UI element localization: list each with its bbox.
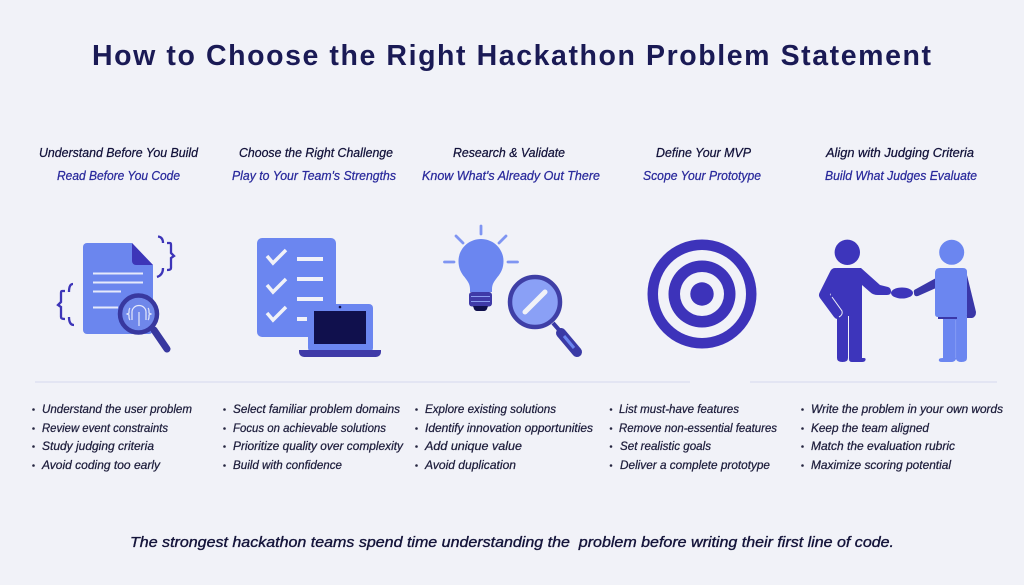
bullet list: Add unique value [424, 441, 522, 453]
bullet list: Review event constraints [42, 423, 168, 435]
bullet list [610, 404, 777, 472]
bullet list [801, 404, 1003, 472]
bullet list [223, 404, 404, 472]
panel: define your mvp [610, 146, 777, 472]
icon: target [648, 240, 756, 348]
bullet list: Understand the user problem [42, 404, 192, 416]
panel: understand before you build [32, 146, 199, 472]
heading: Understand Before You Build [39, 146, 199, 160]
title: How to Choose the Right Hackathon Problem Statement [92, 40, 932, 72]
subheading: Play to Your Team's Strengths [232, 169, 396, 183]
icon: light bulb and magnifier [444, 226, 577, 352]
bullet list: Study judging criteria [42, 441, 154, 453]
heading: Define Your MVP [656, 146, 752, 160]
icon: two people shaking hands [824, 240, 976, 362]
bullet list: Keep the team aligned [811, 423, 930, 435]
subheading: Build What Judges Evaluate [825, 169, 977, 183]
bullet list: Match the evaluation rubric [811, 441, 955, 453]
panel: choose the right challenge [223, 146, 404, 472]
heading: Choose the Right Challenge [239, 146, 393, 160]
bullet list: Identify innovation opportunities [425, 423, 593, 435]
bullet list: Maximize scoring potential [811, 460, 951, 472]
icon: checklist and laptop [257, 238, 381, 357]
icon: document with magnifier and braces [58, 236, 174, 349]
bullet list: Focus on achievable solutions [233, 423, 386, 435]
bullet list: Avoid coding too early [41, 460, 161, 472]
bullet list: Set realistic goals [620, 441, 711, 453]
subheading: Read Before You Code [57, 169, 180, 183]
bullet list [415, 404, 593, 472]
bullet list: Avoid duplication [424, 460, 516, 472]
bullet list: Deliver a complete prototype [620, 460, 770, 472]
panel: research and validate [415, 146, 600, 472]
heading: Research & Validate [453, 146, 565, 160]
bullet list [32, 404, 192, 472]
subheading: Know What's Already Out There [422, 169, 600, 183]
bullet list: List must-have features [619, 404, 739, 416]
bullet list: Prioritize quality over complexity [233, 441, 404, 453]
subheading: Scope Your Prototype [643, 169, 761, 183]
bullet list: Explore existing solutions [425, 404, 556, 416]
heading: Align with Judging Criteria [825, 146, 974, 160]
closing statement: The strongest hackathon teams spend time understanding the problem before writing their first line of code. [130, 535, 894, 551]
panel: align with judging criteria [801, 146, 1003, 472]
bullet list: Write the problem in your own words [811, 404, 1003, 416]
bullet list: Select familiar problem domains [233, 404, 400, 416]
bullet list: Build with confidence [233, 460, 342, 472]
bullet list: Remove non-essential features [619, 423, 777, 435]
